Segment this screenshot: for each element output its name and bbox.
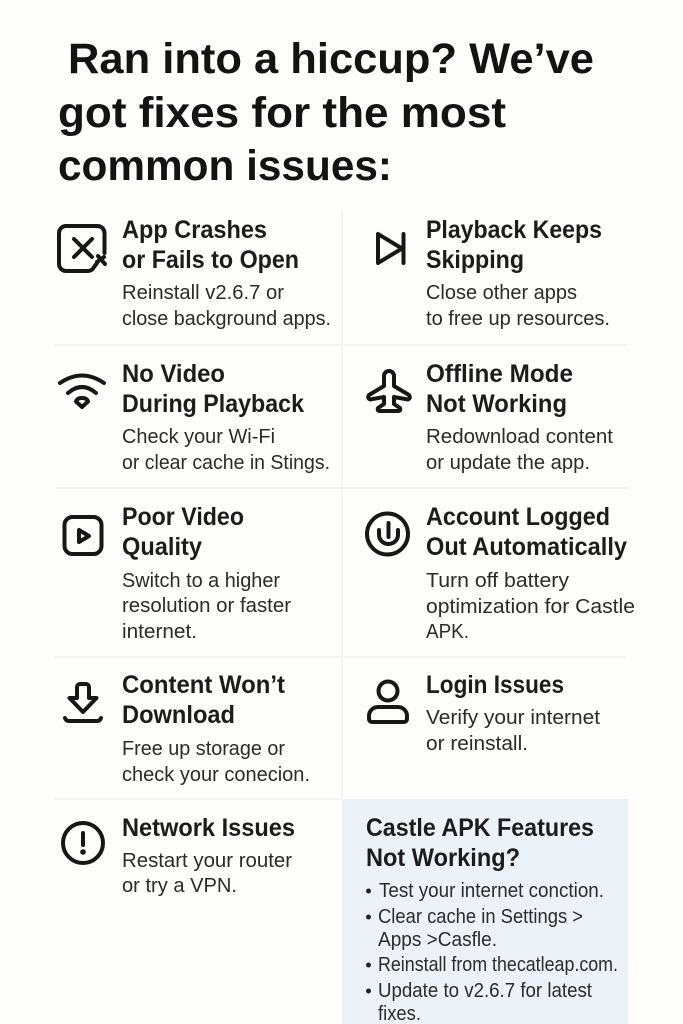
title: common issues: <box>58 142 392 190</box>
panel: Poor Video Quality <box>64 503 291 643</box>
heading: Login Issues: Login Issues <box>426 671 564 699</box>
heading: Offline Mode Not Working <box>426 360 573 418</box>
heading: Account Logged Out Automatically <box>426 503 627 561</box>
text: Offline Mode fix: or update the app. <box>426 451 590 474</box>
bullet list: Update to v2.6.7 for latest <box>378 979 592 1002</box>
text: Login fix: Verify your internet <box>426 706 600 729</box>
text: Content fix <box>122 737 310 786</box>
panel: Castle APK features background <box>342 799 628 1024</box>
bullet list: Apps >Casfle. <box>378 928 497 951</box>
text: No Video fix <box>122 425 330 474</box>
text: Network fix <box>122 849 292 897</box>
heading: Castle APK Features Not Working <box>366 814 594 872</box>
heading: No Video During Playback: No Video <box>122 360 225 388</box>
heading: Playback Keeps Skipping: Skipping <box>426 246 524 274</box>
text: Offline Mode fix: Redownload content <box>426 425 613 448</box>
heading: Content Won't Download <box>122 671 286 729</box>
heading: No Video During Playback <box>122 360 304 418</box>
panel: App Crashes <box>59 216 331 330</box>
heading: Castle APK Features Not Working: Castle APK Features <box>366 814 594 842</box>
text: Offline Mode fix <box>426 425 613 474</box>
title: Ran into a hiccup? We’ve <box>68 35 594 83</box>
panel: Account Logged Out <box>367 503 635 643</box>
text: Content fix: Free up storage or <box>122 737 285 760</box>
panel: No Video During Playback <box>60 360 330 474</box>
icon: download <box>65 684 101 721</box>
heading: Poor Video Quality: Quality <box>122 533 202 561</box>
text: Playback fix <box>426 281 610 330</box>
panel: Playback Keeps Skipping <box>378 216 610 330</box>
text: Account fix: optimization for Castle <box>426 595 635 618</box>
text: Account fix: APK. <box>426 620 469 643</box>
text: No Video fix: Check your Wi-Fi <box>122 425 275 448</box>
heading: Content Won't Download: Content Won’t <box>122 671 286 699</box>
icon: power <box>367 514 408 554</box>
text: Content fix: check your conecion. <box>122 763 310 786</box>
heading: Account Logged Out Automatically: Out Automatically <box>426 533 627 561</box>
heading: Content Won't Download: Download <box>122 701 235 729</box>
text: Playback fix: to free up resources. <box>426 307 610 330</box>
icon: wifi <box>60 376 104 407</box>
bullet list: Test your internet conction. <box>379 879 604 902</box>
callout: Castle APK Features <box>366 814 618 1024</box>
text: App Crashes fix <box>122 281 331 330</box>
text: App Crashes fix: Reinstall v2.6.7 or <box>122 281 284 304</box>
text: Login fix <box>426 706 600 755</box>
panel: Login Issues <box>369 671 600 755</box>
heading: Offline Mode Not Working: Offline Mode <box>426 360 573 388</box>
heading: Network Issues: Network Issues <box>122 814 295 842</box>
title <box>58 35 594 190</box>
title: got fixes for the most <box>58 89 506 137</box>
bullet list: Reinstall from thecatleap.com. <box>378 953 618 976</box>
icon: airplane <box>368 371 410 411</box>
bullet list: Clear cache in Settings > <box>378 905 583 928</box>
heading: Account Logged Out Automatically: Account Logged <box>426 503 610 531</box>
heading: App Crashes: App Crashes <box>122 216 267 244</box>
heading: Playback Keeps Skipping <box>426 216 602 274</box>
panel: Content Won't Download <box>65 671 310 786</box>
heading: Poor Video Quality <box>122 503 244 561</box>
text: Poor Video fix: resolution or faster <box>122 594 291 617</box>
text: Account fix <box>426 569 635 643</box>
heading: Poor Video Quality: Poor Video <box>122 503 244 531</box>
panel: Network Issues <box>63 814 295 897</box>
bullet list <box>366 879 618 1024</box>
text: Login fix: or reinstall. <box>426 732 528 755</box>
text: Network fix: or try a VPN. <box>122 874 237 897</box>
text: Network fix: Restart your router <box>122 849 292 872</box>
heading: No Video During Playback: During Playback <box>122 390 304 418</box>
text: Account fix: Turn off battery <box>426 569 570 592</box>
heading: App Crashes <box>122 216 299 274</box>
heading: Offline Mode Not Working: Not Working <box>426 390 567 418</box>
heading: Playback Keeps Skipping: Playback Keeps <box>426 216 602 244</box>
text: Playback fix: Close other apps <box>426 281 577 304</box>
icon: crashed app window <box>59 226 105 271</box>
heading: App Crashes: or Fails to Open <box>122 246 299 274</box>
icon: play box <box>64 517 102 554</box>
icon: alert circle <box>63 823 103 863</box>
text: Poor Video fix <box>122 569 291 643</box>
text: Poor Video fix: Switch to a higher <box>122 569 280 592</box>
text: App Crashes fix: close background apps. <box>122 307 331 330</box>
panel: Offline Mode Not Working <box>368 360 613 474</box>
icon: user <box>369 682 407 722</box>
heading: Castle APK Features Not Working: Not Working? <box>366 844 520 872</box>
icon: skip forward <box>378 234 404 263</box>
text: No Video fix: or clear cache in Stings. <box>122 451 330 474</box>
text: Poor Video fix: internet. <box>122 620 197 643</box>
